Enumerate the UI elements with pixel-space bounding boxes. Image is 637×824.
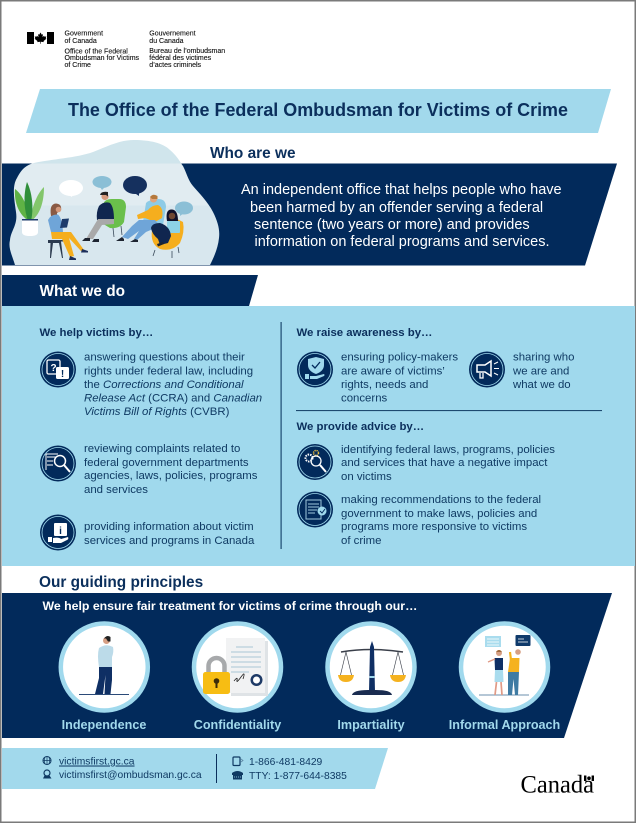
panel: contact footer (2, 748, 388, 789)
phone number: 1-866-481-8429 (249, 757, 323, 768)
text: ensuring policy-makers (341, 352, 458, 364)
item: answering questions (40, 352, 262, 418)
heading bar: what we do (2, 275, 258, 306)
description text: sentence (two years or more) and provides (254, 217, 530, 233)
icon: question and exclamation bubbles (40, 352, 76, 388)
website link: victimsfirst.gc.ca (59, 756, 135, 768)
text: government to make laws, policies and (341, 508, 537, 520)
description text: been harmed by an offender serving a federal (250, 200, 543, 216)
heading: who are we: Who are we (210, 145, 296, 162)
panel: what we do (2, 306, 635, 566)
plant (15, 182, 44, 236)
icon: shield in hand (297, 352, 333, 388)
description text: An independent office that helps people who have (241, 182, 562, 198)
column: we raise awareness by (296, 327, 574, 404)
icon: Canadian flag (27, 32, 54, 44)
dark band (2, 164, 617, 266)
woman seated in yellow chair (151, 209, 184, 258)
icon: megaphone (469, 352, 505, 388)
column: we help victims by (40, 327, 262, 550)
label: Impartiality (337, 718, 405, 732)
text: the Corrections and Conditional (84, 379, 244, 391)
heading: we raise awareness by: We raise awareness by… (296, 327, 432, 339)
French signature: Bureau de l’ombudsman (149, 48, 225, 55)
English signature: of Crime (64, 62, 91, 69)
divider vertical (280, 322, 282, 549)
icon: information in open hand: i (59, 526, 62, 537)
text: we are and (512, 366, 569, 378)
principle: impartiality (328, 624, 414, 732)
icon: magnifier over document (40, 446, 76, 482)
text: what we do (512, 379, 571, 391)
man in yellow seated in blue chair (116, 195, 166, 242)
description text: information on federal programs and services. (254, 234, 549, 250)
English signature: Office of the Federal (64, 48, 128, 56)
heading: we help victims by: We help victims by… (40, 327, 153, 339)
item: making recommendations (297, 492, 541, 547)
illustration: group conversation (9, 140, 220, 265)
email address: victimsfirst@ombudsman.gc.ca (59, 770, 202, 781)
label: Informal Approach (449, 718, 560, 732)
text: sharing who (513, 352, 574, 364)
woman with tablet (48, 204, 88, 260)
text: reviewing complaints related to (84, 443, 240, 455)
icon: phone (233, 757, 243, 766)
label: Confidentiality (194, 718, 281, 732)
text: Release Act (CCRA) and Canadian (84, 392, 262, 404)
icon: small flag over final a (584, 776, 594, 781)
illustration: man standing (79, 636, 129, 694)
icon: TTY (232, 771, 243, 780)
principle: confidentiality (194, 624, 281, 732)
heading: we provide advice by: We provide advice by… (296, 421, 424, 433)
icon: document with check mark (297, 492, 333, 528)
panel: guiding principles (2, 593, 612, 738)
text: federal government departments (84, 457, 249, 469)
title banner (26, 89, 611, 133)
panel: who are we (0, 135, 617, 266)
text: answering questions about their (84, 352, 245, 364)
principle: independence (61, 624, 148, 732)
icon: information in open hand (40, 514, 76, 550)
man in navy seated in green chair (82, 192, 126, 242)
text: identifying federal laws, programs, policies (341, 444, 555, 456)
subheading: We help ensure fair treatment for victims of crime through our… (42, 599, 417, 613)
illustration: lock and certificate (203, 638, 268, 696)
divider (216, 754, 217, 783)
text: concerns (341, 392, 388, 404)
icon: globe (43, 756, 51, 764)
title banner: The Office of the Federal Ombudsman for Victims of Crime (68, 100, 568, 120)
illustration: scales of justice (338, 641, 406, 695)
text: providing information about victim (84, 521, 254, 533)
text: Victims Bill of Rights (CVBR) (84, 406, 229, 418)
divider horizontal (296, 410, 602, 411)
heading bar: what we do: What we do (40, 283, 125, 300)
English signature: Ombudsman for Victims (64, 55, 140, 62)
text: and services that have a negative impact (341, 457, 548, 469)
text: services and programs in Canada (84, 535, 255, 547)
text: on victims (341, 471, 392, 483)
French signature: Gouvernement (149, 30, 196, 38)
text: programs more responsive to victims (341, 521, 527, 533)
TTY number: TTY: 1-877-644-8385 (249, 771, 347, 782)
label: Independence (62, 718, 146, 732)
item: sharing who we are (469, 352, 574, 391)
principle: informal approach (449, 624, 560, 732)
French signature: d’actes criminels (149, 62, 202, 69)
French signature: du Canada (149, 38, 184, 45)
text: rights, needs and (341, 379, 428, 391)
English signature: of Canada (64, 38, 97, 45)
column: we provide advice by (296, 421, 555, 547)
government of Canada header signature (27, 30, 225, 69)
item: reviewing complaints (40, 443, 258, 496)
icon: gears and magnifier (297, 444, 333, 480)
text: of crime (341, 535, 382, 547)
heading: our guiding principles: Our guiding principles (39, 574, 203, 591)
text: making recommendations to the federal (341, 494, 541, 506)
text: and services (84, 484, 148, 496)
item: identifying federal laws (297, 444, 555, 483)
Canada wordmark: Canada (520, 772, 594, 798)
English signature: Government (64, 30, 103, 38)
icon: question and exclamation bubbles: ! (61, 369, 64, 380)
illustration: two people talking (479, 635, 530, 695)
speech bubbles (59, 180, 83, 196)
icon: email (43, 770, 52, 778)
item: ensuring policy-makers (297, 352, 458, 404)
text: rights under federal law, including (84, 366, 253, 378)
French signature: fédéral des victimes (149, 55, 212, 62)
item: providing information (40, 514, 255, 550)
text: agencies, laws, policies, programs (84, 470, 258, 482)
icon: question and exclamation bubbles: ? (50, 363, 57, 374)
text: are aware of victims’ (341, 366, 445, 378)
